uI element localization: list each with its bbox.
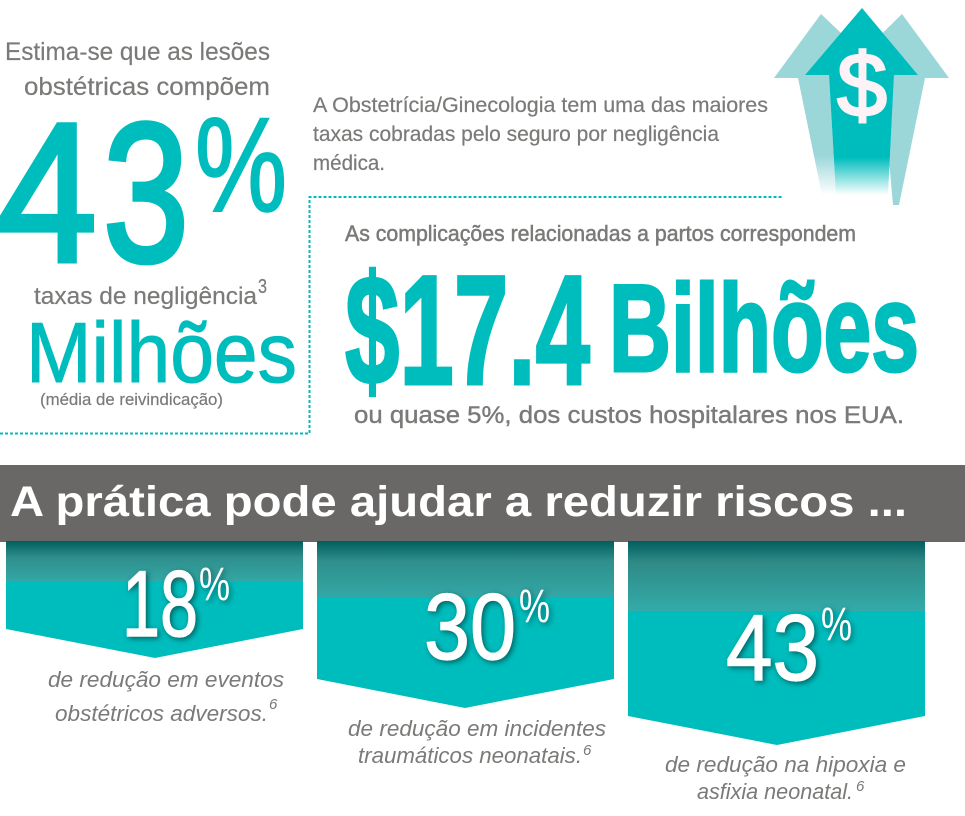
caption: média de reivindicação: (média de reivindicação) — [40, 390, 223, 409]
big number: 43%: 4 — [0, 82, 97, 303]
big number: 43%: 3 — [103, 82, 189, 303]
caption: 18%: de redução em eventos — [48, 667, 284, 692]
big number: 43%: % — [195, 91, 287, 240]
panel: 30%: 30 — [424, 574, 516, 679]
caption: 43%: asfixia neonatal. — [697, 779, 853, 804]
panel: 18%: 18 — [122, 551, 198, 656]
panel: 43% — [628, 541, 925, 745]
text: obstetrics premiums — [313, 94, 768, 175]
intro text: obstetric injuries — [5, 38, 270, 101]
caption: 43% — [665, 752, 906, 804]
text: hospital costs: ou quase 5%, dos custos hospitalares nos EUA. — [354, 402, 904, 429]
heading: Milhões: Milhões — [26, 306, 297, 401]
caption: 18% — [48, 667, 284, 726]
intro text: obstetric injuries: Estima-se que as lesões — [5, 38, 270, 66]
panel: 18%: % — [199, 557, 230, 610]
caption: 43%: de redução na hipoxia e — [665, 752, 906, 777]
text: obstetrics premiums: taxas cobradas pelo seguro por negligência — [313, 123, 719, 146]
caption: 18%: 6 — [269, 696, 278, 713]
icon: rising arrows with dollar: $ — [837, 36, 887, 136]
intro text: obstetric injuries: obstétricas compõem — [24, 73, 270, 101]
icon: rising arrows with dollar — [774, 8, 949, 205]
text: obstetrics premiums: médica. — [313, 152, 385, 175]
big figure: $17.4: $17.4 — [345, 244, 590, 418]
panel: 43%: % — [821, 597, 852, 650]
text: taxas de negligência: taxas de negligência — [34, 283, 258, 310]
big number: 43% — [0, 82, 287, 303]
panel: 43%: 43 — [726, 595, 819, 700]
caption: 30%: 6 — [583, 742, 592, 759]
panel: 18% — [6, 541, 303, 658]
caption: 30%: de redução em incidentes — [348, 716, 606, 741]
text: obstetrics premiums: A Obstetrícia/Ginecologia tem uma das maiores — [313, 94, 768, 117]
panel: 30%: % — [519, 579, 550, 632]
panel: 30% — [317, 541, 614, 708]
text: birth complications: As complicações relacionadas a partos correspondem — [345, 221, 856, 246]
section band — [0, 465, 965, 542]
caption: 18%: obstétricos adversos. — [55, 701, 268, 726]
band heading: A prática pode ajudar a reduzir riscos ... — [10, 478, 907, 526]
text: taxas de negligência: 3 — [258, 276, 267, 298]
caption: 30%: traumáticos neonatais. — [358, 743, 582, 768]
caption: 43%: 6 — [856, 778, 865, 795]
caption: 30% — [348, 716, 606, 768]
